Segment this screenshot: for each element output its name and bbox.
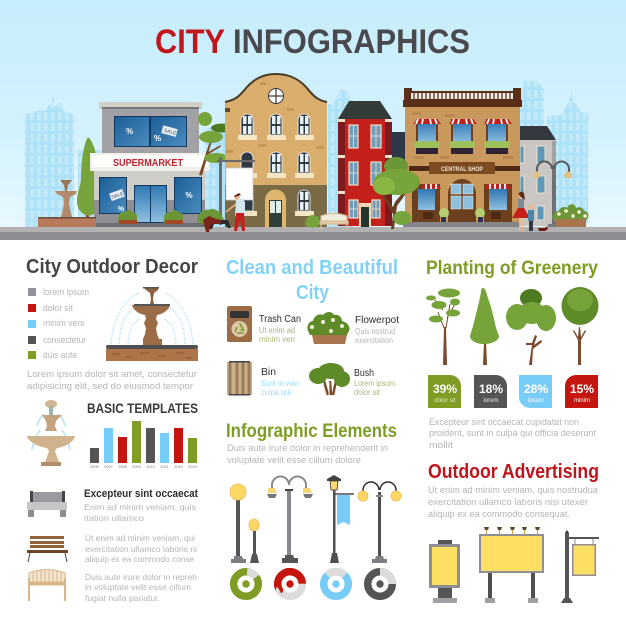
legend: duis aute bbox=[43, 350, 77, 360]
road bbox=[0, 227, 626, 240]
icon: flowerpot bbox=[307, 312, 350, 344]
icon: tree 1 bbox=[426, 288, 460, 365]
text: advertising description: aliquip ex ea commodo consequat. bbox=[428, 509, 570, 519]
building: supermarket: % bbox=[118, 206, 125, 213]
bar chart: 2008 bbox=[118, 465, 127, 469]
bench in scene bbox=[320, 214, 348, 230]
text: wooden bench description bbox=[85, 533, 197, 564]
text: bin: Sunt in vian bbox=[261, 379, 299, 388]
building: supermarket bbox=[77, 102, 210, 227]
panel: city outdoor decor bbox=[26, 256, 198, 603]
icon: city light board bbox=[429, 540, 460, 603]
text: classic bench description bbox=[85, 572, 197, 603]
text: excepteur block bbox=[84, 488, 198, 523]
building: central shop bbox=[403, 88, 522, 227]
icon: stone bench bbox=[27, 491, 67, 517]
bar chart bbox=[90, 421, 197, 469]
icon: tree 4 bbox=[562, 287, 598, 365]
building: tan townhouse bbox=[225, 74, 327, 227]
heading: outdoor advertising: Outdoor Advertising bbox=[428, 461, 599, 483]
text: wooden bench description: aliquip ex ea commodo conse bbox=[85, 554, 194, 564]
building: supermarket: SALE bbox=[111, 191, 125, 201]
text: trash can: Trash Can bbox=[259, 314, 301, 325]
text: flowerpot: exercitation bbox=[355, 336, 393, 345]
text: lorem paragraph: Lorem ipsum dolor sit amet, consectetur bbox=[27, 369, 197, 380]
icon: bush bbox=[309, 363, 350, 395]
skyline bbox=[25, 81, 588, 228]
title bbox=[155, 23, 470, 61]
heading: clean and beautiful city: Clean and Beautiful bbox=[226, 257, 398, 279]
text: flowerpot bbox=[355, 315, 399, 345]
central shop sign: CENTRAL SHOP bbox=[441, 166, 484, 173]
supermarket sign text: SUPERMARKET bbox=[113, 158, 183, 169]
text: trash can: minim ven bbox=[259, 335, 295, 344]
building: red house bbox=[338, 101, 405, 227]
heading: planting of greenery: Planting of Greenery bbox=[426, 258, 598, 279]
text: bin: Bin bbox=[261, 367, 276, 378]
bar chart: 2011 bbox=[160, 465, 169, 469]
icon: large fountain bbox=[106, 287, 198, 361]
text: infographic description: Duis aute irure dolor in reprehenderit in bbox=[227, 443, 388, 453]
legend: consectetur bbox=[43, 335, 86, 345]
text: bush: Lorem ipsum bbox=[354, 379, 395, 388]
text: advertising description: exercitation ullamco laboris nisi utexer bbox=[428, 497, 588, 507]
street sign board bbox=[217, 157, 255, 225]
legend bbox=[28, 287, 89, 360]
text: advertising description bbox=[428, 485, 598, 519]
street bush near sign bbox=[197, 209, 225, 225]
text: lorem paragraph: adipisicing elit, sed do eiusmod tempor bbox=[27, 381, 193, 392]
icon: lantern lamp with banner bbox=[327, 475, 354, 563]
heading: basic templates: BASIC TEMPLATES bbox=[87, 400, 198, 416]
panel: planting of greenery bbox=[426, 258, 598, 450]
text: flowerpot: Quis nostrud bbox=[355, 327, 395, 336]
text: greenery description bbox=[429, 417, 596, 450]
stat tiles: 18% bbox=[479, 382, 503, 396]
stat tiles: 28% bbox=[524, 382, 548, 396]
building: supermarket: SALE bbox=[163, 128, 178, 137]
building: supermarket: % bbox=[154, 134, 161, 143]
stat tiles: dolor sit bbox=[434, 398, 456, 404]
stat tiles: minim bbox=[574, 398, 590, 404]
tree in front of red house bbox=[373, 157, 420, 229]
icon: tree 2 bbox=[470, 288, 499, 365]
text: bush: dolor sit bbox=[354, 388, 381, 397]
text: lorem paragraph bbox=[27, 369, 197, 392]
text: flowerpot: Flowerpot bbox=[355, 315, 399, 326]
legend: dolor sit bbox=[43, 303, 73, 313]
icon: classic bench bbox=[28, 570, 66, 601]
building: grey house bbox=[520, 126, 556, 226]
scene fountain bbox=[38, 180, 96, 227]
building: supermarket: % bbox=[185, 191, 193, 200]
bar chart: 2007 bbox=[104, 465, 113, 469]
text: bush bbox=[354, 368, 395, 397]
scene planter bush bbox=[553, 204, 588, 227]
text: wooden bench description: Ut enim ad minim veniam, qui bbox=[85, 533, 195, 543]
text: bin bbox=[261, 367, 299, 397]
icon: wooden bench bbox=[27, 536, 68, 562]
legend: lorem ipsum bbox=[43, 287, 89, 297]
icon: tiered fountain bbox=[27, 400, 75, 466]
icon: billboard bbox=[479, 527, 544, 603]
icon: double globe lamp bbox=[358, 482, 401, 563]
small bush by bench bbox=[305, 215, 319, 228]
panel: outdoor advertising bbox=[428, 461, 599, 603]
text: trash can: Ut enim ad bbox=[259, 326, 295, 335]
stat tiles: ipsum bbox=[528, 398, 544, 404]
text: excepteur block: Excepteur sint occaecat bbox=[84, 488, 198, 500]
icon: double street lamp bbox=[267, 476, 313, 563]
bar chart: 2006 bbox=[90, 465, 99, 469]
legend: minim veni bbox=[43, 318, 84, 328]
sky background bbox=[0, 0, 626, 228]
stat tiles: 15% bbox=[570, 382, 594, 396]
heading: city outdoor decor: City Outdoor Decor bbox=[26, 256, 198, 278]
bar chart: 2010 bbox=[146, 465, 155, 469]
person walking dogs bbox=[203, 193, 245, 232]
icon: globe lamp and small lamp bbox=[230, 484, 259, 563]
bar chart: 2012 bbox=[174, 465, 183, 469]
heading: clean and beautiful city bbox=[226, 257, 398, 304]
text: greenery description: proident, sunt in culpa qui officia deserunt bbox=[429, 428, 596, 438]
text: trash can bbox=[259, 314, 301, 344]
stat tiles: lorem bbox=[483, 398, 499, 404]
text: classic bench description: fugiat nulla pariatur. bbox=[85, 593, 160, 603]
donut charts bbox=[233, 567, 392, 601]
building: supermarket: % bbox=[126, 127, 133, 136]
icon: tree 3 bbox=[506, 289, 556, 365]
text: bin: culpa qui bbox=[261, 388, 291, 397]
icon: trash can bbox=[227, 306, 252, 342]
stat tiles bbox=[428, 375, 598, 408]
woman and child bbox=[512, 192, 548, 231]
text: bush: Bush bbox=[354, 368, 374, 379]
text: greenery description: Excepteur sint occaecat cupidatat non bbox=[429, 417, 579, 427]
stat tiles: 39% bbox=[433, 382, 457, 396]
title: INFOGRAPHICS bbox=[233, 23, 470, 61]
bar chart: 2013 bbox=[188, 465, 197, 469]
text: wooden bench description: exercitation ullamco laboris ni bbox=[85, 544, 197, 554]
icon: hanging sign bbox=[561, 530, 599, 603]
text: classic bench description: Duis aute irure dolor in repreh bbox=[85, 572, 197, 582]
heading: clean and beautiful city: City bbox=[296, 282, 330, 304]
text: greenery description: mollit bbox=[429, 440, 454, 450]
panel: infographic elements bbox=[226, 421, 401, 601]
bar chart: 2009 bbox=[132, 465, 141, 469]
text: infographic description bbox=[227, 443, 388, 465]
scene street lamp bbox=[533, 162, 572, 227]
left cone tree bbox=[77, 137, 99, 219]
icon: bin bbox=[227, 361, 252, 396]
text: excepteur block: itation ullamco bbox=[84, 513, 144, 523]
text: infographic description: voluptate velit esse cillum dolore bbox=[227, 455, 361, 465]
text: advertising description: Ut enim ad minim veniam, quis nostrudua bbox=[428, 485, 598, 495]
text: classic bench description: in voluptate velit esse cillum bbox=[85, 582, 191, 592]
title: CITY bbox=[155, 23, 225, 61]
scene tree behind supermarket bbox=[198, 112, 233, 176]
text: excepteur block: Enim ad minim veniam, quis bbox=[84, 502, 196, 512]
heading: infographic elements: Infographic Elements bbox=[226, 421, 397, 442]
panel: clean and beautiful city bbox=[226, 257, 399, 397]
